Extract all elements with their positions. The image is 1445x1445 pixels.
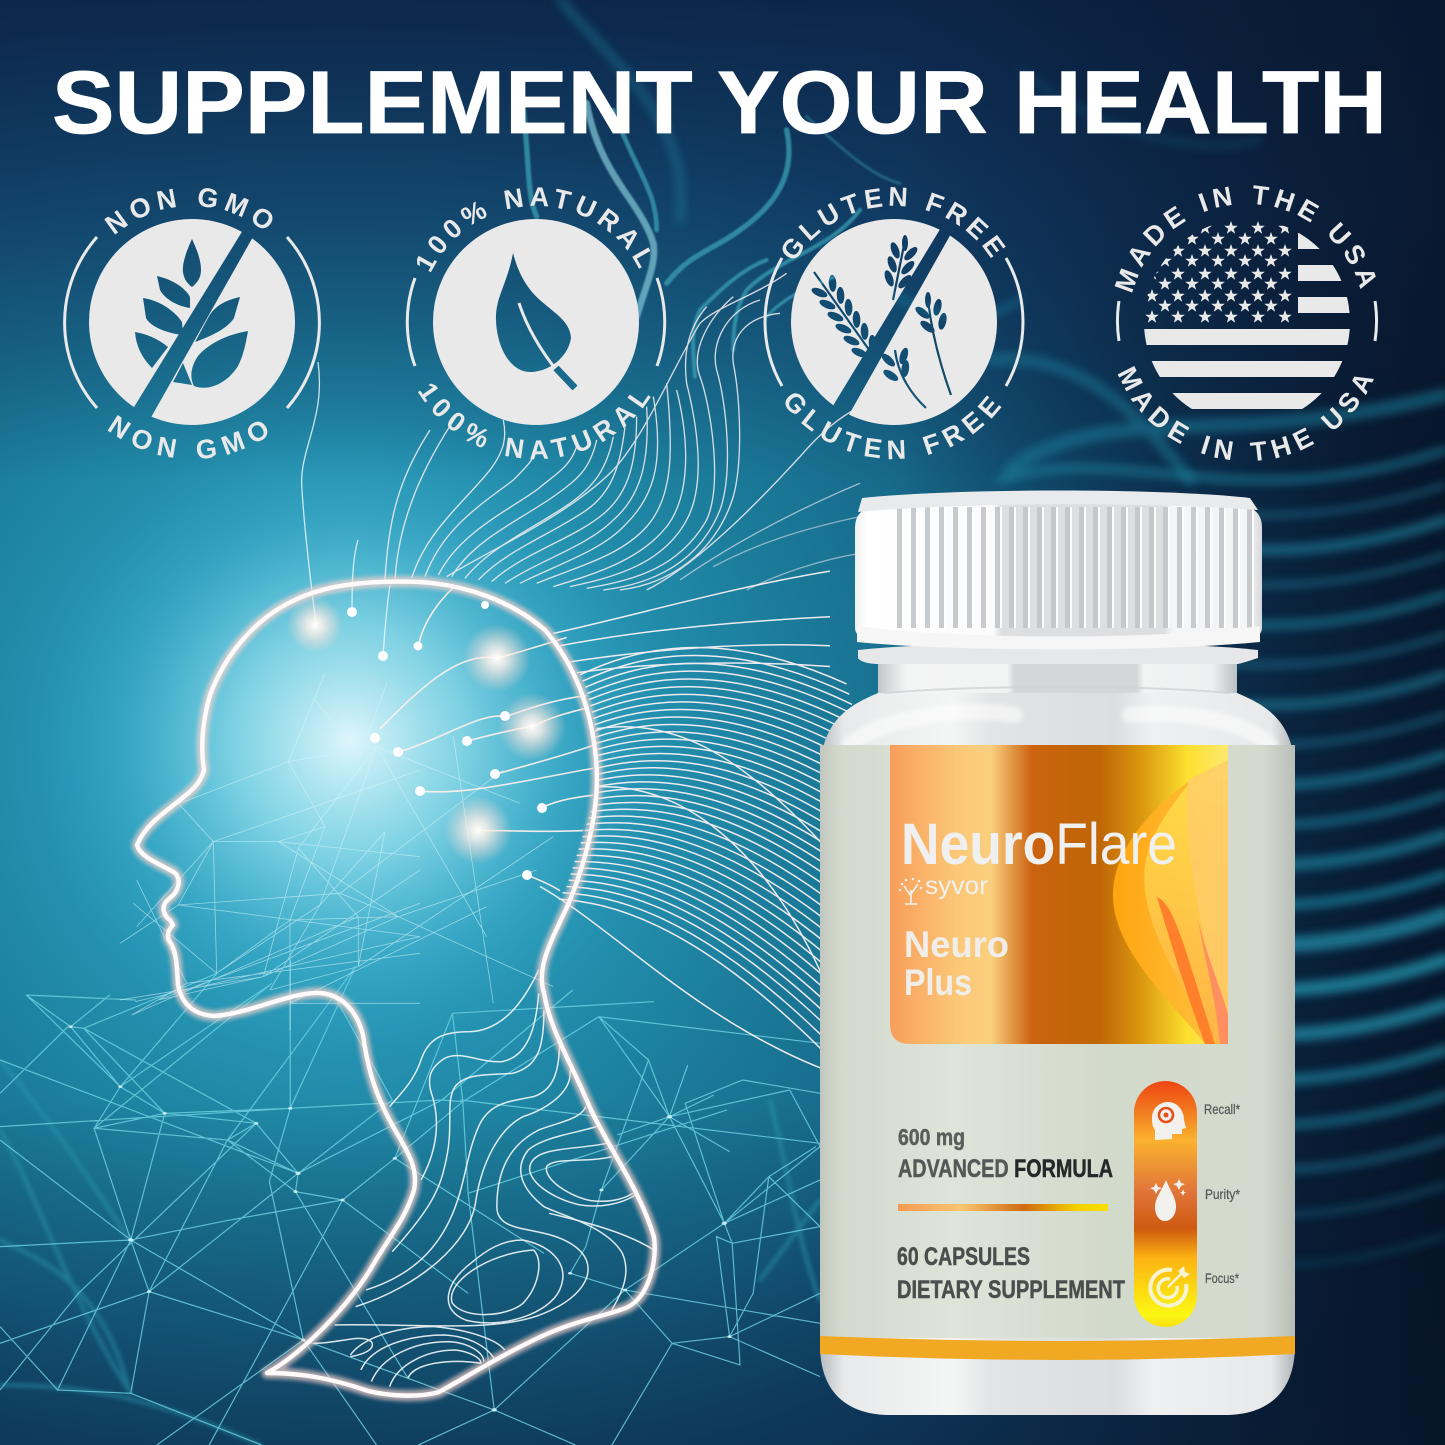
badge arcs	[765, 258, 1023, 386]
icon: water drop	[1150, 1179, 1186, 1221]
badge arcs	[1117, 301, 1377, 341]
bottle body	[820, 693, 1295, 1415]
icon: target	[1150, 1266, 1190, 1306]
curved label top: MADE IN THE USA	[1114, 185, 1376, 292]
icon: tree	[899, 878, 922, 904]
glowing brain nodes	[287, 597, 566, 880]
badge: non gmo	[63, 188, 321, 458]
bottle cap	[855, 490, 1262, 650]
supplement type text: DIETARY SUPPLEMENT	[897, 1276, 1125, 1304]
head inner fibres	[380, 588, 593, 891]
badge: gluten free	[764, 187, 1024, 460]
dosage text: 600 mg	[898, 1124, 965, 1150]
fine wave lines from head to bottle	[540, 571, 863, 1069]
orange band	[820, 1336, 1295, 1360]
curved label top: 100% NATURAL	[417, 187, 650, 272]
curved label bottom: MADE IN THE USA	[1118, 366, 1374, 461]
neck contour lines	[314, 970, 654, 1387]
shoulder highlights	[850, 687, 1270, 745]
badge arcs	[65, 237, 319, 408]
badge: made in the usa	[1114, 185, 1378, 461]
polygon network	[0, 960, 820, 1445]
curved label top: GLUTEN FREE	[782, 187, 1006, 258]
teal ribbons above the fibres	[523, 103, 900, 377]
brand name: NeuroFlare	[901, 812, 1177, 877]
icon: head	[1152, 1102, 1186, 1140]
bottle neck	[878, 655, 1237, 700]
badge: 100% natural	[406, 187, 666, 460]
head inner glow	[20, 410, 680, 1070]
flowing streaks right of bottle	[1000, 450, 1445, 1265]
formula text: ADVANCED FORMULA	[898, 1155, 1113, 1183]
badge arcs	[407, 278, 665, 366]
benefit label purity: Purity*	[1205, 1186, 1240, 1202]
icon: flag circle	[1140, 221, 1358, 409]
orange product panel	[890, 745, 1228, 1044]
flame graphic	[1113, 760, 1228, 1044]
benefits pill	[1134, 1081, 1197, 1327]
title: SUPPLEMENT YOUR HEALTH	[52, 52, 1387, 152]
blurred network strands	[0, 1060, 820, 1445]
curved label bottom: 100% NATURAL	[418, 384, 651, 460]
curved label bottom: GLUTEN FREE	[786, 393, 1002, 460]
benefit label focus: Focus*	[1205, 1270, 1239, 1286]
neck collar	[858, 642, 1258, 664]
icon: crossed plant	[89, 219, 295, 425]
product name: Plus	[904, 962, 972, 1003]
supplement bottle	[820, 490, 1295, 1415]
product name	[904, 924, 1009, 1003]
inner head network	[120, 673, 553, 1030]
curved label bottom: NON GMO	[108, 415, 268, 458]
icon: leaf	[433, 219, 639, 425]
product name: Neuro	[904, 924, 1009, 965]
curved label top: NON GMO	[104, 188, 272, 234]
network nodes	[69, 1025, 732, 1412]
sub brand: syvor	[925, 872, 988, 900]
capsule count text: 60 CAPSULES	[897, 1243, 1030, 1271]
label sage area	[820, 745, 1295, 1338]
benefit label recall: Recall*	[1204, 1101, 1240, 1117]
gradient divider	[898, 1204, 1108, 1211]
icon: crossed wheat	[791, 219, 997, 425]
soft teal waves background	[523, 0, 1445, 1265]
fibres to badges	[302, 362, 390, 656]
upward fibres to the upper right	[385, 273, 860, 590]
head outline	[137, 582, 655, 1396]
